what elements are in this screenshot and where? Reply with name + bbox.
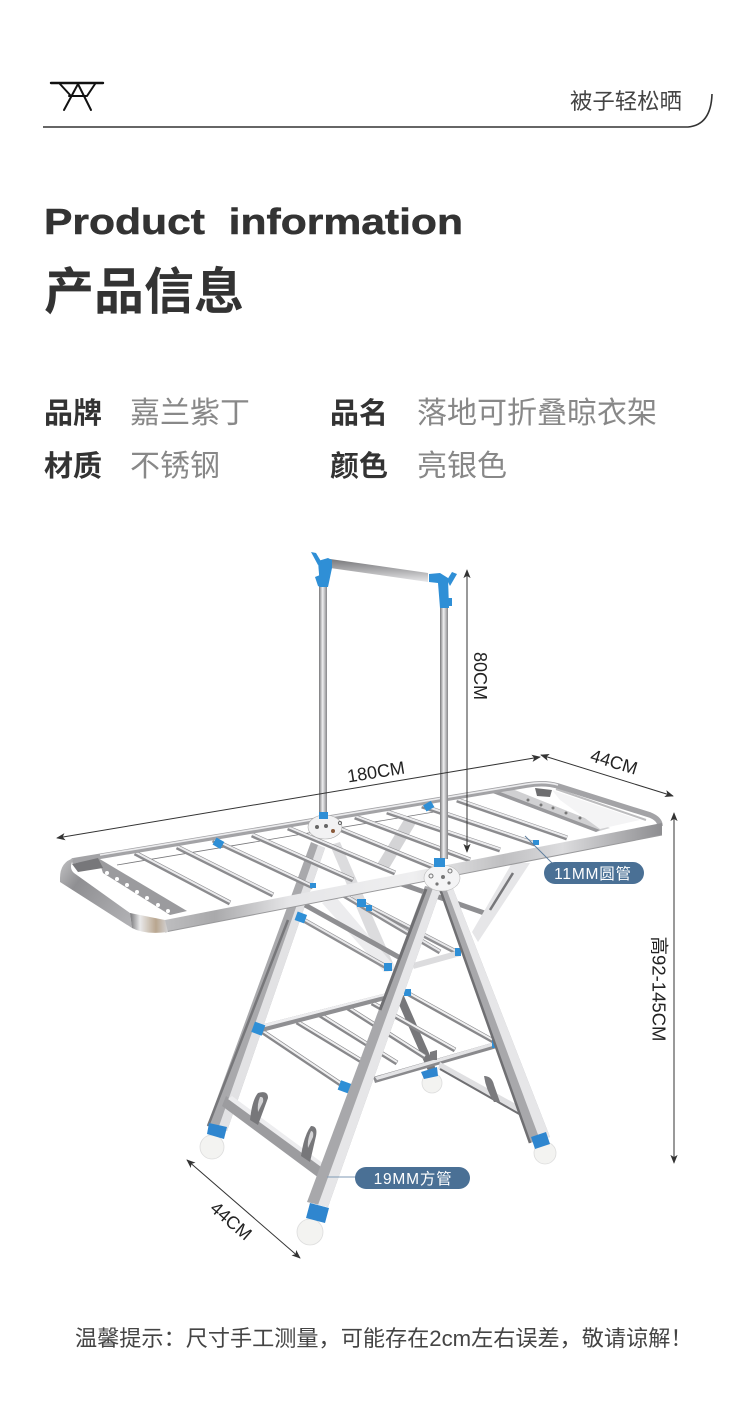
back legs: [207, 818, 432, 1131]
telescoping hanger frame: [311, 552, 457, 867]
front rail: [165, 823, 662, 932]
callout: 11MM round tube: [525, 836, 644, 884]
callout: 19MM square tube: 19MM方管: [374, 1170, 452, 1188]
spec: product name: 品名: [330, 397, 388, 430]
dimension: base depth 44CM: [187, 1160, 300, 1258]
lower shelf: [260, 992, 497, 1087]
top tray: cross bars: [117, 799, 567, 903]
spec: material: 材质: [44, 450, 102, 483]
blue joints on tray: [213, 801, 539, 1094]
tray end plates with holes: [98, 786, 646, 915]
callout: 11MM round tube: 11MM圆管: [554, 865, 632, 883]
hanger posts: [319, 586, 327, 814]
dimension: 180CM: 180CM: [346, 758, 406, 786]
dimension: base depth 44CM: 44CM: [206, 1198, 256, 1244]
dimension: tray width 44CM: 44CM: [588, 745, 640, 779]
dimension: tray width 44CM: [541, 745, 673, 796]
top tray: outer frame: [60, 783, 662, 933]
header rule with curved end: [43, 94, 712, 127]
pivot plate: back: [308, 815, 342, 839]
left end face: [60, 858, 132, 928]
header icon: drying rack logo: [51, 83, 103, 110]
title: English: Product information: [44, 201, 463, 242]
back rail and right rim: [72, 784, 660, 861]
spec: brand: 嘉兰紫丁: [130, 397, 250, 430]
spec: material: 不锈钢: [130, 450, 220, 483]
spec: colour: [330, 450, 507, 483]
pivot plate: front: [424, 865, 460, 891]
front left chrome corner: [130, 913, 168, 933]
callout: 19MM square tube: [327, 1167, 470, 1189]
spec: product name: 落地可折叠晾衣架: [417, 397, 657, 430]
hanger blue connectors: [311, 552, 457, 867]
right front strut: [472, 863, 530, 942]
back-left leg lower detail: [208, 920, 288, 1126]
inner chrome corner: [72, 858, 103, 872]
spec: material: [44, 450, 220, 483]
footer note: 温馨提示：尺寸手工测量，可能存在2cm左右误差，敬请谅解！: [75, 1326, 692, 1351]
spec: brand: [44, 397, 250, 430]
middle shelf: [300, 880, 490, 968]
spec: colour: 颜色: [330, 450, 388, 483]
dimension: hanger 80CM: 80CM: [470, 652, 490, 700]
spec: colour: 亮银色: [417, 450, 507, 483]
dimension: height 92-145CM: 高92-145CM: [648, 937, 670, 1041]
spec list: [44, 397, 657, 483]
bottom foot bars and foot plates: [222, 1050, 523, 1181]
hanger top bar: [330, 559, 428, 582]
header caption: 被子轻松晒: [570, 89, 682, 114]
dimension: 180CM: [57, 757, 540, 838]
product illustration: folding drying rack: [60, 552, 662, 1245]
title: Chinese: 产品信息: [44, 264, 244, 320]
spec: brand: 品牌: [44, 397, 102, 430]
front legs: [307, 886, 550, 1207]
feet and caster wheels: [200, 1067, 556, 1245]
